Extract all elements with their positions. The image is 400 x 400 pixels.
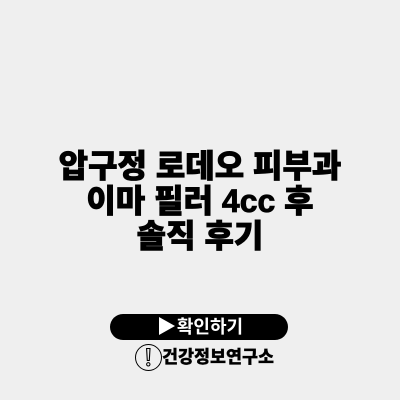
icon: play triangle: [159, 317, 175, 335]
icon: exclamation circle: [135, 344, 162, 371]
title: 압구정 로데오 피부과: [59, 148, 341, 184]
title: 이마 필러 4cc 후: [86, 182, 314, 218]
button label: 확인하기: [177, 317, 243, 337]
title: [59, 148, 341, 254]
brand name: 건강정보연구소: [162, 347, 274, 367]
button: confirm: [110, 314, 288, 340]
title: 솔직 후기: [137, 218, 263, 254]
